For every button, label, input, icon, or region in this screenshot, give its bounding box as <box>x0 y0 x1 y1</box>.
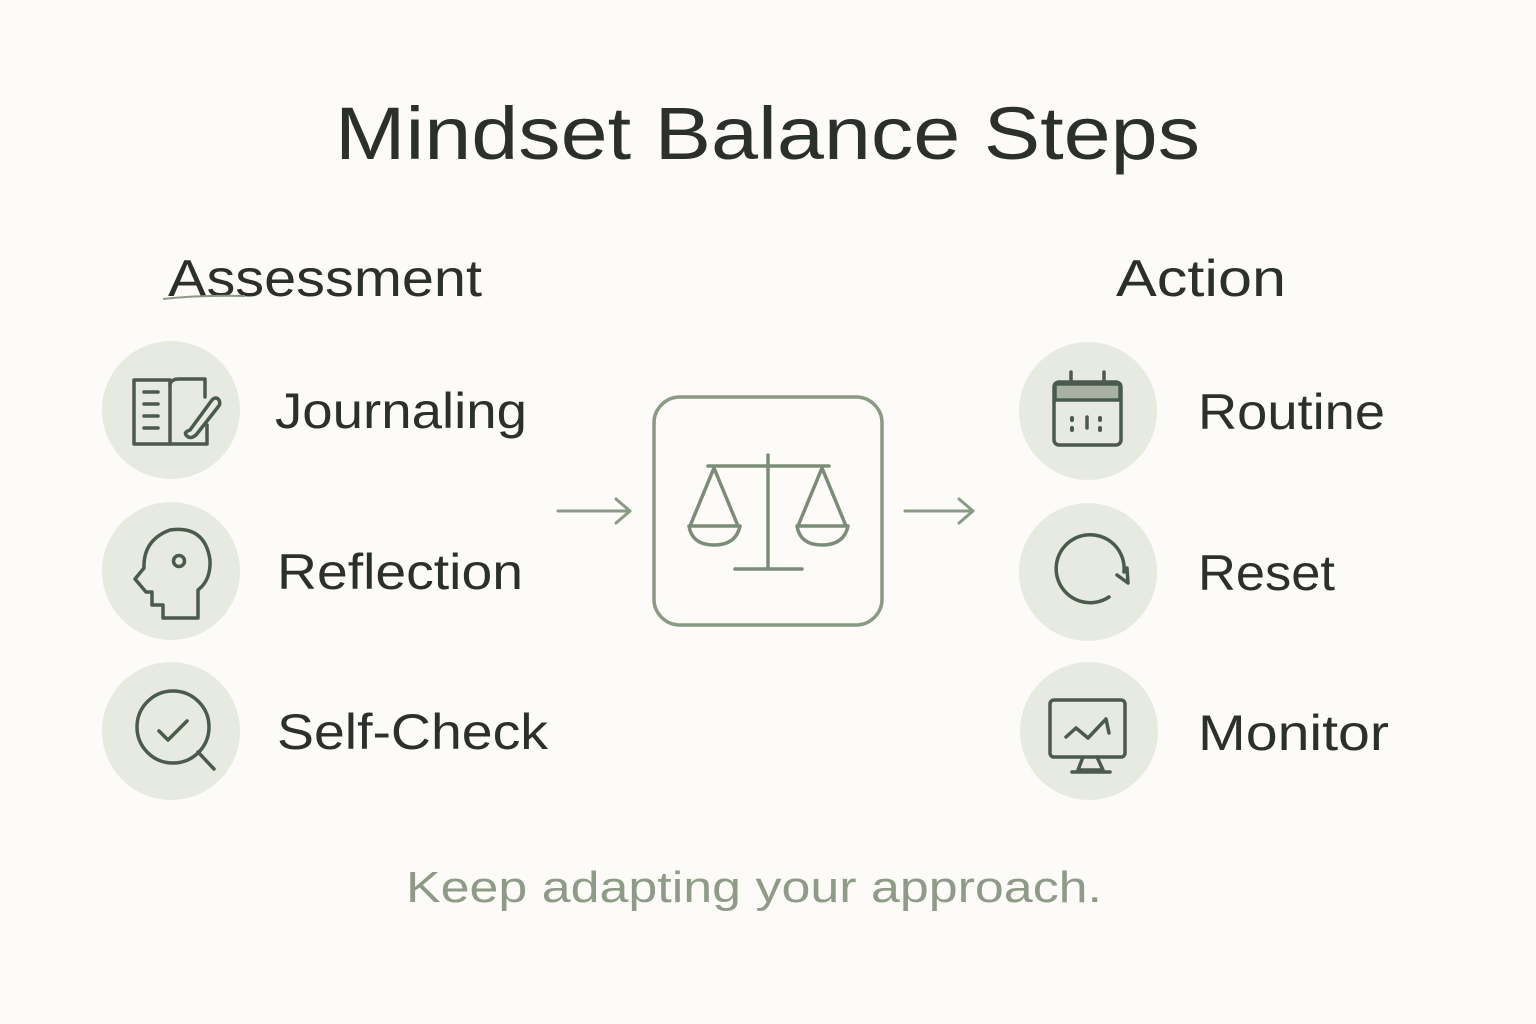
title: Mindset Balance Steps <box>335 92 1200 175</box>
item: Self-Check: Self-Check <box>277 704 549 760</box>
item: Monitor <box>1020 662 1389 800</box>
icon: calendar <box>1054 372 1121 445</box>
icon: head <box>135 529 210 618</box>
item: Monitor: Monitor <box>1198 705 1389 761</box>
item: Routine: Routine <box>1198 384 1385 440</box>
footer caption: Keep adapting your approach. <box>406 863 1102 912</box>
icon: reset <box>1056 535 1128 603</box>
arrow: center to right <box>905 499 973 523</box>
arrow: left to center <box>558 499 630 523</box>
icon: scale <box>689 455 848 569</box>
item: Journaling <box>102 341 527 479</box>
item: Reflection: Reflection <box>277 544 523 600</box>
item: Reset: Reset <box>1198 545 1335 601</box>
heading: Action: Action <box>1116 250 1286 308</box>
icon: monitor <box>1050 700 1125 772</box>
icon: journal <box>134 379 220 444</box>
item: Reflection <box>102 502 523 640</box>
item: Journaling: Journaling <box>275 383 527 439</box>
center: balance scale box <box>654 397 882 625</box>
item: Self-Check <box>102 662 549 800</box>
item: Reset <box>1019 503 1335 641</box>
item: Routine <box>1019 342 1385 480</box>
heading: Assessment: Assessment <box>168 250 483 308</box>
icon: magnifier check <box>137 691 214 769</box>
